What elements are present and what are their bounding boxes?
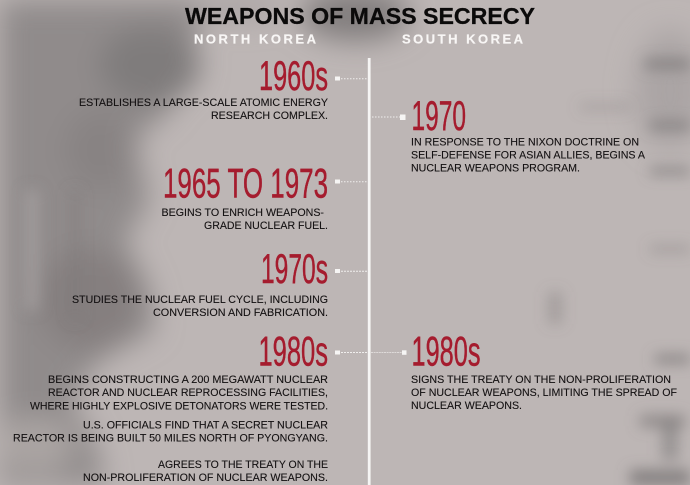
connector: north 1960s	[335, 76, 367, 80]
heading: north korea: NORTH KOREA	[194, 32, 317, 46]
entry: north 1960s	[79, 52, 329, 122]
entry: north 1965 to 1973: BEGINS TO ENRICH WEAPONS-	[162, 207, 324, 219]
entry: north 1970s: 1970s	[261, 245, 328, 292]
entry: north 1960s: 1960s	[259, 52, 328, 99]
entry: south 1980s: OF NUCLEAR WEAPONS, LIMITING THE SPREAD OF	[411, 387, 677, 399]
entry: north 1980s: NON-PROLIFERATION OF NUCLEAR WEAPONS.	[83, 472, 328, 484]
entry: south 1970: IN RESPONSE TO THE NIXON DOCTRINE ON	[411, 136, 639, 148]
entry: south 1980s: SIGNS THE TREATY ON THE NON-PROLIFERATION	[411, 374, 671, 386]
entry: north 1970s	[72, 245, 328, 319]
entry: north 1980s: BEGINS CONSTRUCTING A 200 MEGAWATT NUCLEAR	[48, 374, 328, 386]
entry: north 1965 to 1973	[162, 160, 328, 232]
entry: north 1970s: CONVERSION AND FABRICATION.	[153, 307, 328, 319]
heading: south korea: SOUTH KOREA	[402, 32, 524, 46]
entry: north 1965 to 1973: 1965 TO 1973	[163, 160, 328, 206]
entry: north 1965 to 1973: GRADE NUCLEAR FUEL.	[204, 220, 328, 232]
entry: south 1970: SELF-DEFENSE FOR ASIAN ALLIES, BEGINS A	[411, 150, 645, 162]
entry: north 1980s: U.S. OFFICIALS FIND THAT A SECRET NUCLEAR	[83, 420, 328, 432]
entry: north 1960s: ESTABLISHES A LARGE-SCALE ATOMIC ENERGY	[79, 97, 329, 109]
entry: south 1970: 1970	[412, 92, 466, 139]
entry: south 1980s: NUCLEAR WEAPONS.	[411, 400, 522, 412]
title: WEAPONS OF MASS SECRECY	[185, 3, 535, 29]
entry: north 1970s: STUDIES THE NUCLEAR FUEL CYCLE, INCLUDING	[72, 294, 328, 306]
entry: north 1980s: REACTOR AND NUCLEAR REPROCESSING FACILITIES,	[48, 387, 328, 399]
entry: north 1960s: RESEARCH COMPLEX.	[211, 110, 328, 122]
entry: north 1980s	[13, 328, 328, 484]
connector: 1980s north to south	[335, 350, 406, 355]
entry: south 1970	[411, 92, 645, 174]
entry: north 1980s: AGREES TO THE TREATY ON THE	[158, 459, 328, 471]
connector: south 1970	[372, 114, 406, 120]
connector: north 1965 to 1973	[335, 180, 367, 184]
entry: south 1980s: 1980s	[412, 328, 480, 374]
timeline spine	[368, 58, 371, 485]
entry: south 1970: NUCLEAR WEAPONS PROGRAM.	[411, 162, 580, 174]
entry: north 1980s: REACTOR IS BEING BUILT 50 MILES NORTH OF PYONGYANG.	[13, 432, 328, 444]
entry: north 1980s: WHERE HIGHLY EXPLOSIVE DETONATORS WERE TESTED.	[30, 400, 328, 412]
connector: north 1970s	[335, 269, 367, 273]
entry: north 1980s: 1980s	[258, 328, 328, 374]
entry: south 1980s	[411, 328, 677, 412]
